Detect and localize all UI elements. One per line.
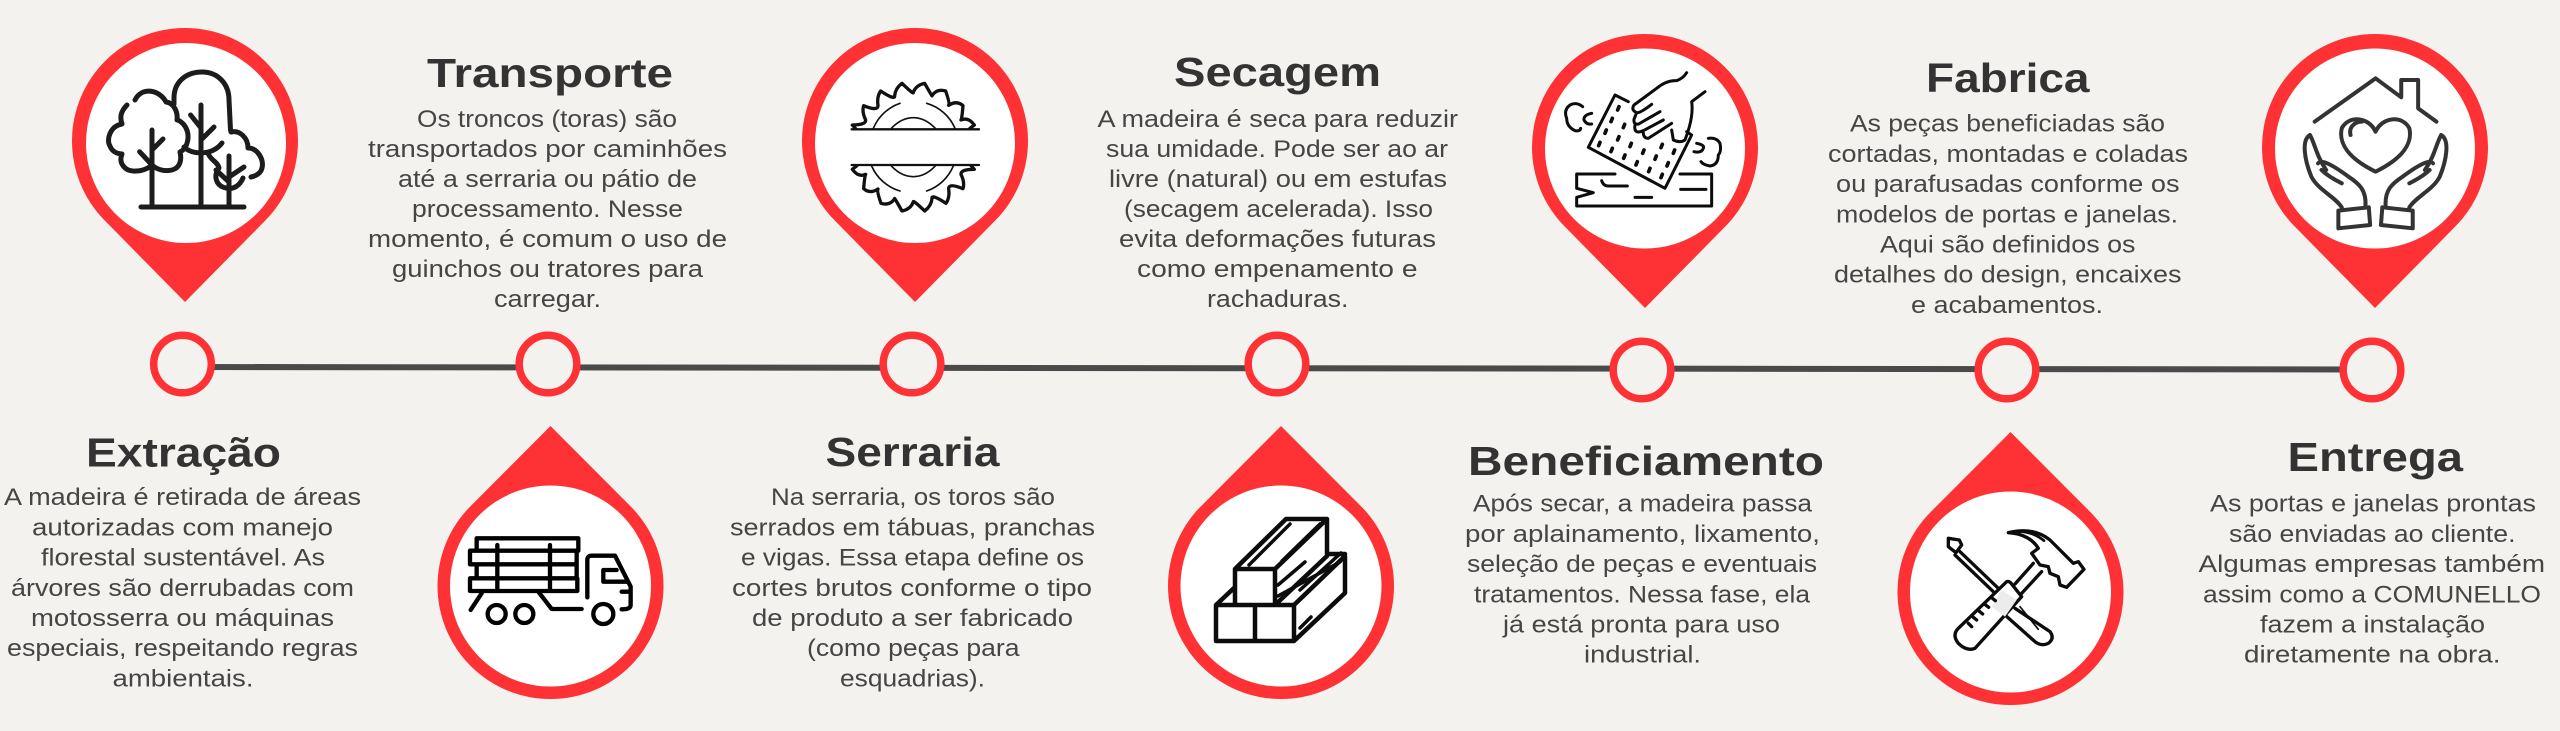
- text: Entrega description: fazem a instalação: [2260, 612, 2485, 638]
- text: Secagem description: [1098, 106, 1458, 313]
- icon: stacked lumber: [1216, 519, 1345, 641]
- timeline node 1: [154, 335, 211, 393]
- panel: step 6 Fabrica: [1828, 55, 2188, 705]
- text: Beneficiamento description: por aplainamento, lixamento,: [1465, 521, 1820, 548]
- icon: log truck: [470, 538, 631, 624]
- text: Entrega description: As portas e janelas prontas: [2210, 491, 2536, 518]
- pin: Serraria: [802, 28, 1028, 302]
- timeline line: [200, 367, 2360, 370]
- icon: hands holding heart under house: [2305, 78, 2446, 228]
- text: Transporte description: carregar.: [494, 286, 601, 313]
- text: Secagem description: rachaduras.: [1207, 286, 1348, 313]
- pin: Fabrica: [1898, 432, 2124, 705]
- panel: step 7 Entrega: [2198, 34, 2545, 669]
- text: Beneficiamento description: Após secar, a madeira passa: [1473, 491, 1813, 518]
- icon: split saw blade: [852, 83, 979, 211]
- heading: Serraria: Serraria: [826, 429, 1001, 475]
- text: Secagem description: evita deformações futuras: [1119, 226, 1436, 253]
- text: Extração description: especiais, respeitando regras: [7, 635, 358, 662]
- text: Beneficiamento description: tratamentos. Nessa fase, ela: [1474, 581, 1811, 608]
- text: Extração description: A madeira é retirada de áreas: [4, 484, 361, 511]
- text: Fabrica description: detalhes do design, encaixes: [1834, 262, 2182, 289]
- pin: Transporte: [438, 426, 664, 699]
- panel: step 3 Serraria: [730, 28, 1095, 692]
- panel: step 1 Extração: [4, 28, 361, 692]
- timeline node 6: [1978, 341, 2036, 399]
- pin: Extração: [72, 28, 298, 302]
- heading: Beneficiamento: Beneficiamento: [1468, 438, 1824, 484]
- timeline node 3: [883, 335, 941, 393]
- text: Serraria description: cortes brutos conforme o tipo: [732, 575, 1092, 602]
- text: Serraria description: serrados em tábuas, pranchas: [730, 514, 1095, 541]
- text: Entrega description: [2198, 491, 2545, 669]
- icon: trees: [108, 72, 262, 207]
- panel: step 2 Transporte: [368, 50, 727, 699]
- text: Transporte description: transportados por caminhões: [368, 136, 727, 163]
- text: Entrega description: Algumas empresas também: [2198, 551, 2545, 578]
- text: Extração description: florestal sustentável. As: [41, 545, 325, 572]
- timeline node 2: [519, 335, 577, 393]
- text: Extração description: [4, 484, 361, 692]
- text: Extração description: árvores são derrubadas com: [11, 575, 354, 602]
- text: Entrega description: são enviadas ao cliente.: [2229, 521, 2516, 548]
- text: Fabrica description: modelos de portas e janelas.: [1836, 201, 2178, 228]
- timeline node 7: [2343, 341, 2401, 399]
- text: Fabrica description: As peças beneficiadas são: [1850, 111, 2165, 138]
- text: Transporte description: processamento. Nesse: [412, 196, 683, 223]
- text: Secagem description: como empenamento e: [1137, 256, 1418, 283]
- text: Fabrica description: [1828, 111, 2188, 319]
- heading: Fabrica: Fabrica: [1926, 55, 2091, 101]
- text: Serraria description: [730, 484, 1095, 692]
- text: Fabrica description: e acabamentos.: [1911, 292, 2103, 319]
- panel: step 4 Secagem: [1098, 49, 1458, 699]
- text: Beneficiamento description: [1465, 491, 1820, 669]
- pin: Secagem: [1168, 426, 1394, 699]
- text: Transporte description: [368, 106, 727, 313]
- panel: step 5 Beneficiamento: [1465, 34, 1824, 669]
- heading: Transporte: Transporte: [427, 50, 673, 96]
- text: Serraria description: (como peças para: [807, 635, 1020, 662]
- text: Extração description: motosserra ou máquinas: [31, 605, 334, 632]
- heading: Extração: Extração: [86, 430, 281, 476]
- heading: Secagem: Secagem: [1174, 49, 1381, 95]
- text: Extração description: autorizadas com manejo: [32, 514, 333, 541]
- text: Beneficiamento description: seleção de peças e eventuais: [1467, 551, 1817, 578]
- pin: Entrega: [2262, 34, 2488, 308]
- timeline node 4: [1248, 335, 1306, 393]
- pin: Beneficiamento: [1532, 34, 1758, 308]
- text: Secagem description: livre (natural) ou em estufas: [1109, 166, 1447, 193]
- text: Serraria description: de produto a ser fabricado: [752, 605, 1073, 632]
- text: Extração description: ambientais.: [112, 665, 254, 692]
- text: Transporte description: guinchos ou tratores para: [392, 256, 704, 283]
- text: Fabrica description: cortadas, montadas e coladas: [1828, 141, 2188, 168]
- text: Serraria description: e vigas. Essa etapa define os: [741, 545, 1084, 572]
- text: Beneficiamento description: já está pronta para uso: [1502, 612, 1780, 638]
- text: Secagem description: (secagem acelerada). Isso: [1124, 196, 1433, 223]
- text: Beneficiamento description: industrial.: [1584, 642, 1701, 669]
- text: Fabrica description: ou parafusadas conforme os: [1836, 171, 2180, 198]
- text: Serraria description: esquadrias).: [840, 665, 985, 692]
- timeline node 5: [1613, 341, 1671, 399]
- text: Transporte description: até a serraria ou pátio de: [398, 166, 697, 193]
- text: Fabrica description: Aqui são definidos os: [1880, 232, 2136, 258]
- text: Entrega description: assim como a COMUNELLO: [2203, 581, 2541, 608]
- icon: sanding block: [1566, 73, 1721, 206]
- text: Transporte description: Os troncos (toras) são: [417, 106, 677, 133]
- text: Transporte description: momento, é comum o uso de: [368, 226, 727, 253]
- text: Secagem description: sua umidade. Pode ser ao ar: [1106, 136, 1448, 163]
- text: Secagem description: A madeira é seca para reduzir: [1098, 106, 1458, 133]
- text: Entrega description: diretamente na obra.: [2244, 642, 2500, 669]
- icon: hammer and screwdriver: [1948, 531, 2084, 649]
- heading: Entrega: Entrega: [2288, 434, 2464, 480]
- text: Serraria description: Na serraria, os toros são: [771, 484, 1055, 511]
